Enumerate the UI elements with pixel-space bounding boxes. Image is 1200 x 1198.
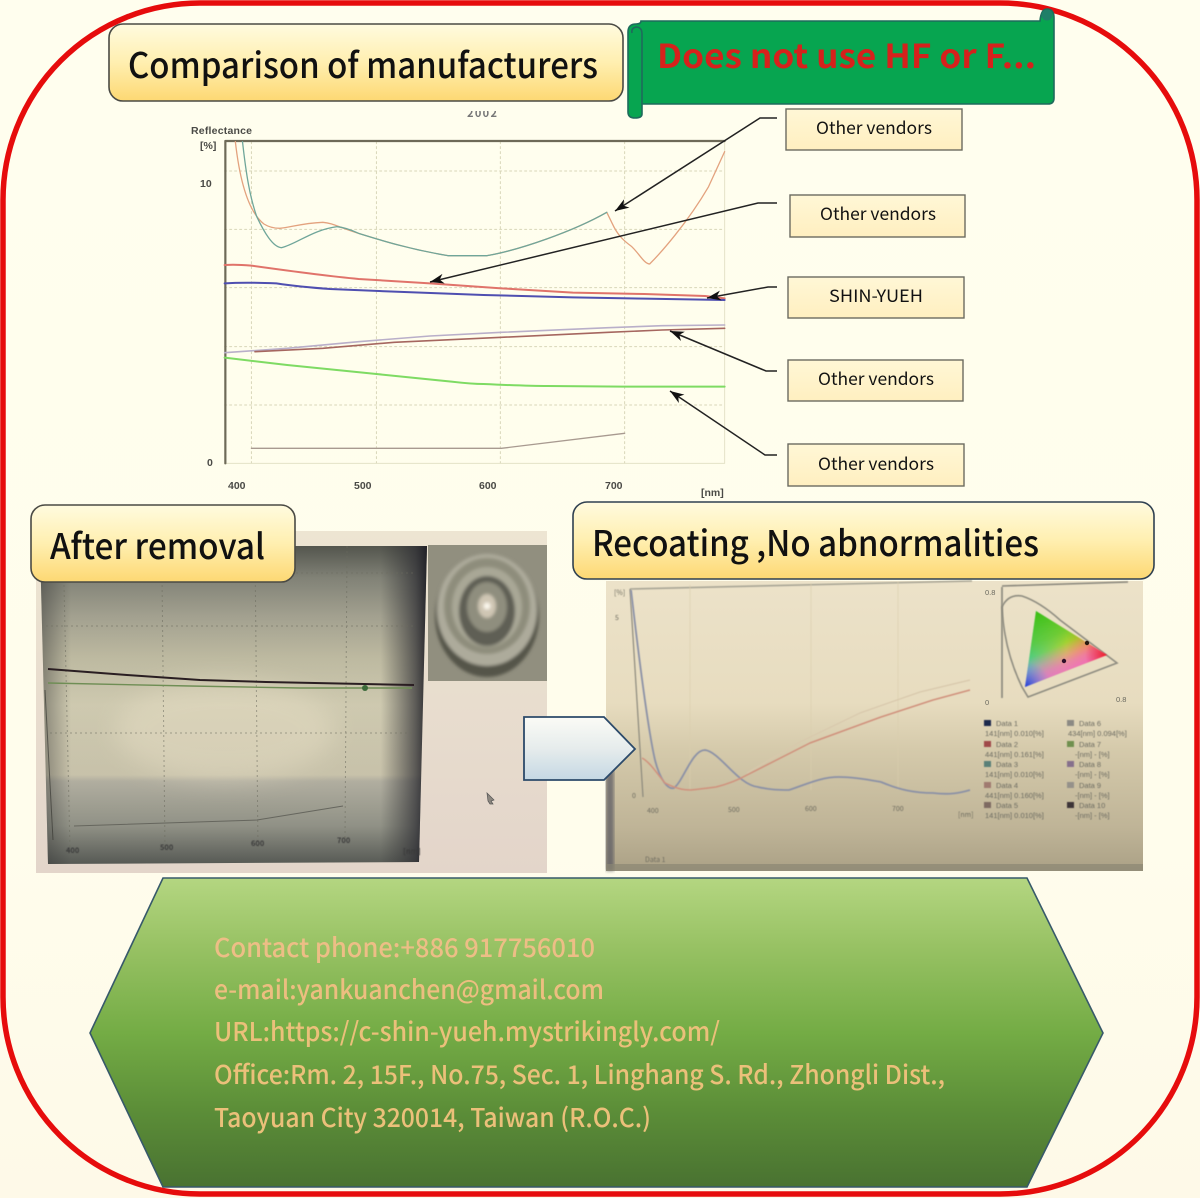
chromaticity diagram: 0.8	[985, 588, 995, 597]
arrow: before to after	[524, 717, 635, 780]
heading: recoating	[573, 502, 1154, 579]
chromaticity diagram: 0.8	[1116, 695, 1126, 704]
chart title fragment: 2002	[467, 105, 497, 121]
recoating curves	[631, 590, 970, 794]
recoating screen labels: 700	[892, 804, 904, 814]
arrow: to SHIN-YUEH	[707, 287, 777, 298]
heading: after removal: After removal	[50, 519, 265, 570]
colour gamut triangle	[1025, 611, 1107, 687]
screen axis labels: 600	[251, 838, 265, 849]
label: SHIN-YUEH: SHIN-YUEH	[829, 282, 923, 307]
legend: -[nm] - [%]	[1075, 770, 1110, 779]
chart axis labels: 0	[207, 457, 213, 469]
legend: Data 3	[996, 760, 1018, 769]
heading: recoating: Recoating ,No abnormalities	[592, 516, 1039, 567]
label: other vendors 3	[788, 360, 963, 401]
legend: 141[nm] 0.010[%]	[985, 811, 1044, 820]
recoating screen labels: 400	[647, 806, 659, 816]
curve: teal vendor	[242, 142, 607, 256]
contact text: Taoyuan City 320014, Taiwan (R.O.C.)	[214, 1098, 651, 1135]
contact text: URL:https://c-shin-yueh.mystrikingly.com/	[214, 1012, 720, 1049]
curve: lilac vendor	[225, 325, 725, 353]
banner: does not use HF	[628, 9, 1054, 118]
screen axis labels: 400	[66, 845, 80, 856]
recoating screen labels	[614, 588, 973, 865]
legend: Data 4	[996, 781, 1018, 790]
legend: Data 8	[1079, 760, 1101, 769]
chart axis labels: Reflectance	[191, 125, 252, 137]
after-removal curves	[45, 669, 414, 840]
legend: -[nm] - [%]	[1075, 811, 1110, 820]
label: other vendors 1	[786, 109, 962, 150]
contact text: e-mail:yankuanchen@gmail.com	[214, 970, 604, 1007]
label: other vendors 3: Other vendors	[818, 365, 934, 390]
label: other vendors 4	[788, 444, 964, 486]
contact text: Office:Rm. 2, 15F., No.75, Sec. 1, Linghang S. Rd., Zhongli Dist.,	[214, 1055, 945, 1092]
banner: does not use HF: Does not use HF or F...	[657, 30, 1036, 78]
chart axis labels: [nm]	[701, 487, 724, 499]
photo: after removal screen	[36, 531, 547, 873]
legend: Data 10	[1079, 801, 1105, 810]
contact text	[214, 928, 945, 1135]
legend: 141[nm] 0.010[%]	[985, 729, 1044, 738]
chart axis labels: 400	[228, 480, 246, 492]
curve: SHIN-YUEH blue	[225, 283, 725, 300]
arrow: to other vendors 1	[615, 118, 777, 211]
curve: green vendor	[225, 358, 725, 387]
chart axis labels: 500	[354, 480, 372, 492]
label: other vendors 4: Other vendors	[818, 450, 934, 475]
label: other vendors 2	[790, 195, 965, 237]
panel: contact info	[90, 878, 1103, 1187]
screen axis labels	[66, 835, 421, 857]
chart grid and axes	[225, 141, 725, 463]
legend: 441[nm] 0.160[%]	[985, 791, 1044, 800]
screen axis labels: [nm]	[403, 846, 421, 857]
legend: 441[nm] 0.161[%]	[985, 750, 1044, 759]
recoating screen labels: [nm]	[958, 810, 973, 820]
screen axis labels: 700	[337, 835, 351, 846]
label: other vendors 2: Other vendors	[820, 200, 936, 225]
recoating screen labels: 0	[632, 791, 636, 801]
icon: mouse cursor	[487, 793, 494, 804]
photo: recoating screen	[606, 581, 1143, 871]
chart axis labels	[191, 125, 724, 499]
recoating screen labels: Data 1	[645, 855, 666, 865]
legend: Data 7	[1079, 740, 1101, 749]
contact text: Contact phone:+886 917756010	[214, 928, 595, 965]
recoating screen labels: 500	[728, 805, 740, 815]
legend: Data 2	[996, 740, 1018, 749]
chart axis labels: [%]	[200, 140, 216, 152]
chart: reflectance comparison	[191, 105, 725, 499]
chart axis labels: 700	[605, 480, 623, 492]
chart axis labels: 600	[479, 480, 497, 492]
screen axis labels: 500	[160, 842, 174, 853]
chart axis labels: 10	[200, 178, 212, 190]
chromaticity diagram	[985, 582, 1128, 707]
curve: orange vendor	[235, 142, 725, 264]
curve: brown vendor	[255, 328, 725, 352]
legend: Data 1	[996, 719, 1018, 728]
label: SHIN-YUEH	[788, 277, 964, 318]
legend	[984, 719, 1127, 820]
curve: red vendor	[225, 265, 725, 298]
heading: comparison of manufacturers: Comparison of manufacturers	[128, 38, 598, 89]
legend: Data 5	[996, 801, 1018, 810]
recoating screen labels: [%]	[614, 588, 625, 598]
legend: 141[nm] 0.010[%]	[985, 770, 1044, 779]
heading: comparison of manufacturers	[109, 24, 623, 101]
monitor chart area	[40, 546, 427, 864]
curve: low grey	[251, 433, 625, 448]
recoating chart axes	[630, 581, 972, 797]
inset: lens photo	[428, 545, 547, 681]
legend: Data 6	[1079, 719, 1101, 728]
arrow: to other vendors 2	[430, 203, 777, 282]
label: other vendors 1: Other vendors	[816, 114, 932, 139]
recoating screen labels: 600	[805, 804, 817, 814]
legend: -[nm] - [%]	[1075, 791, 1110, 800]
legend: Data 9	[1079, 781, 1101, 790]
chromaticity diagram: 0	[985, 698, 989, 707]
arrow: to other vendors 3	[670, 331, 777, 371]
arrow: to other vendors 4	[670, 391, 777, 455]
legend: 434[nm] 0.094[%]	[1068, 729, 1127, 738]
heading: after removal	[31, 505, 295, 582]
legend: -[nm] - [%]	[1075, 750, 1110, 759]
recoating screen labels: 5	[615, 613, 619, 623]
